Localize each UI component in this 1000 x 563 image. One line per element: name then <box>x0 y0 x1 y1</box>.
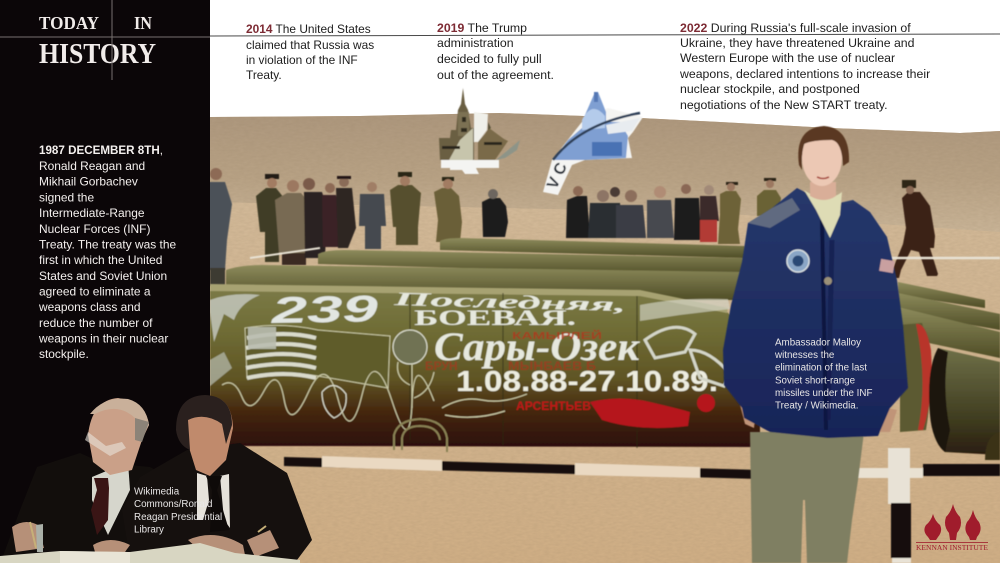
text block: 2019: 2019 The Trump <box>437 21 527 35</box>
text block: 2022: 2022 During Russia's full-scale invasion of <box>680 21 911 35</box>
text block: treaty summary: signed the <box>39 190 94 204</box>
collage: Kremlin tower <box>439 88 520 174</box>
heading: today in history: TODAY <box>39 13 99 33</box>
text block: 2022: Ukraine, they have threatened Ukraine and <box>680 36 915 50</box>
Ambassador caption: Treaty / Wikimedia. <box>775 400 858 412</box>
text block: 2014: 2014 The United States <box>246 22 371 36</box>
photo: desert site background <box>210 110 1000 563</box>
photo caption <box>134 486 222 536</box>
main missile with graffiti: БОЕВАЯ. <box>414 305 576 330</box>
Reagan shirt and tie <box>197 473 230 528</box>
Ambassador caption <box>774 338 872 412</box>
graffiti: red names: БРУН <box>425 359 458 373</box>
Reagan head <box>186 396 233 476</box>
logo: Kennan Institute <box>916 504 988 552</box>
Ambassador caption: witnesses the <box>774 350 835 361</box>
text block: 2014 <box>246 22 374 82</box>
text block: treaty summary: 1987 DECEMBER 8TH, <box>39 143 163 157</box>
neck and face <box>810 182 836 200</box>
collage: US Capitol on torn note <box>543 92 643 195</box>
Gorbachev suit <box>3 453 165 556</box>
text block: 2022 <box>679 21 930 112</box>
Gorbachev head <box>88 398 149 475</box>
hair <box>798 126 849 170</box>
graffiti: flags drawing <box>245 325 390 388</box>
Reagan suit <box>122 443 312 560</box>
text block: treaty summary: States and Soviet Union <box>39 269 167 283</box>
missile stand <box>394 419 447 452</box>
main missile with graffiti: Сары-Озек <box>434 324 641 369</box>
main missile with graffiti: АРСЕНТЬЕВ <box>516 399 591 413</box>
jacket <box>723 188 908 438</box>
text block: treaty summary: stockpile. <box>39 347 89 361</box>
photo caption: Commons/Ronald <box>134 499 212 510</box>
timeline rule <box>210 34 1000 36</box>
graffiti: dates: 1.08.88-27.10.89. <box>456 366 718 398</box>
text block: 2019 <box>437 21 554 82</box>
text block: treaty summary: Ronald Reagan and <box>39 159 145 173</box>
photo caption: Wikimedia <box>134 486 180 498</box>
graffiti: red names: МЫНБАЕВ Б <box>508 359 596 373</box>
text block: treaty summary: Nuclear Forces (INF) <box>39 222 150 236</box>
text block: treaty summary: weapons in their nuclear <box>38 332 168 346</box>
graffiti: flower and signatures <box>222 330 527 430</box>
text block: treaty summary: Intermediate-Range <box>39 206 145 220</box>
Gorbachev shirt and tie <box>92 462 130 535</box>
text block: 2014: in violation of the INF <box>246 53 358 67</box>
collage: US Capitol on torn note: V C <box>544 160 571 192</box>
logo: Kennan Institute: KENNAN INSTITUTE <box>916 543 988 552</box>
text block: 2019: administration <box>437 36 514 50</box>
text block: treaty summary: agreed to eliminate a <box>39 284 151 298</box>
text block: 2019: out of the agreement. <box>437 68 554 82</box>
graffiti: red names: КАМЫРЛЕЙ <box>512 329 602 342</box>
heading: today in history <box>39 13 156 70</box>
right missile ends <box>900 323 1000 460</box>
road barrier and post <box>284 448 1000 563</box>
hands <box>740 405 897 432</box>
main missile with graffiti <box>210 284 760 452</box>
Ambassador caption: elimination of the last <box>775 362 867 374</box>
rear missiles row <box>210 238 1000 358</box>
text block: treaty summary: Treaty. The treaty was the <box>39 238 176 252</box>
text block: 2022: Western Europe with the use of nuclear <box>680 51 895 65</box>
photo caption: Library <box>134 524 164 536</box>
graffiti: text slogans: Последняя, <box>391 289 626 316</box>
badge and patches <box>787 250 809 272</box>
text block: 2014: claimed that Russia was <box>246 38 374 52</box>
text block: treaty summary <box>38 143 176 361</box>
text block: treaty summary: weapons class and <box>38 300 141 314</box>
treaty book <box>0 543 300 563</box>
Ambassador Malloy figure <box>723 126 908 563</box>
hands and pens <box>12 522 279 557</box>
heading: today in history: IN <box>134 13 152 33</box>
trousers <box>750 432 864 563</box>
Ambassador caption: Ambassador Malloy <box>775 338 861 348</box>
people: officials standing behind missiles <box>209 168 938 278</box>
text block: 2022: nuclear stockpile, and postponed <box>680 82 860 96</box>
graffiti: serial number: 239 <box>270 288 379 331</box>
text block: 2019: decided to fully pull <box>437 52 542 66</box>
text block: 2014: Treaty. <box>246 68 282 82</box>
photo caption: Reagan Presidential <box>134 512 222 523</box>
panel: left black sidebar <box>0 0 210 563</box>
graffiti: red names <box>425 329 602 373</box>
sweater collar <box>804 190 842 238</box>
heading: today in history: HISTORY <box>39 38 156 70</box>
text block: 2022: weapons, declared intentions to increase their <box>679 67 930 81</box>
text block: 2022: negotiations of the New START treaty. <box>680 98 888 112</box>
text block: treaty summary: reduce the number of <box>39 316 153 330</box>
photo: Gorbachev and Reagan signing <box>0 395 312 563</box>
Ambassador caption: missiles under the INF <box>775 388 872 399</box>
text block: treaty summary: Mikhail Gorbachev <box>39 174 138 188</box>
Ambassador caption: Soviet short-range <box>775 376 856 386</box>
text block: treaty summary: first in which the United <box>39 253 162 267</box>
